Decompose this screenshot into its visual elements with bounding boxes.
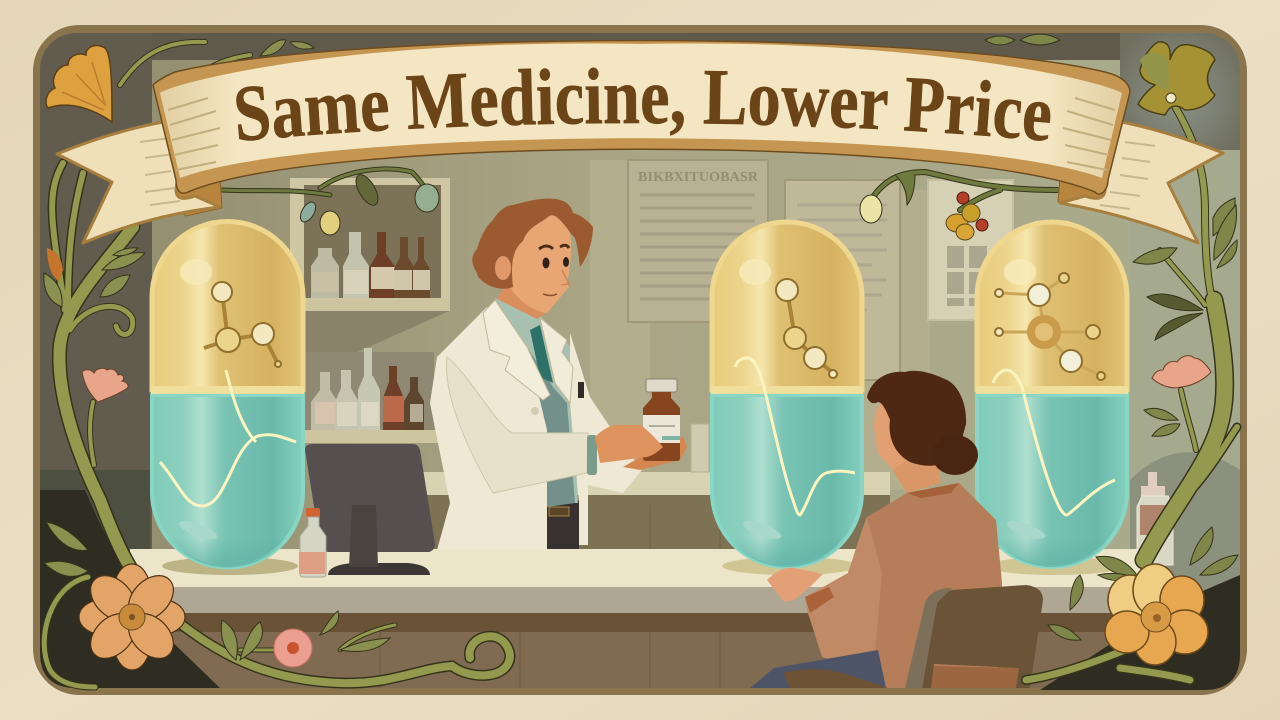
- hair: [867, 371, 966, 466]
- title: Same Medicine, Lower Price: [236, 68, 1050, 141]
- hair bun: [932, 435, 978, 475]
- lapels: [483, 300, 550, 400]
- banner right tail: [1058, 122, 1223, 243]
- tie: [530, 325, 553, 383]
- large peach flower bottom left: [79, 564, 185, 670]
- medicine bottle: [643, 379, 680, 461]
- back wall: [40, 33, 1240, 591]
- hanging sprig left: [297, 171, 439, 235]
- shelf shadow wedge: [306, 311, 448, 352]
- face details: [542, 258, 550, 268]
- chair: [783, 585, 1043, 688]
- wave: [993, 370, 1115, 515]
- pink flower right: [1152, 356, 1211, 388]
- hands: [767, 568, 823, 602]
- window chart: [928, 180, 1013, 320]
- plastic bottle right: [1137, 472, 1173, 565]
- wall poster: BIKBXITUOBASR: [638, 170, 759, 185]
- head: [874, 391, 920, 470]
- trousers: [547, 500, 579, 552]
- cuff: [587, 435, 597, 475]
- large gold flower bottom right: [1105, 564, 1208, 665]
- wall poster: [628, 160, 768, 322]
- floral border: right vines: [222, 103, 1237, 680]
- flower: top-right: [1138, 42, 1215, 115]
- banner main ribbon: [153, 40, 1130, 194]
- vine fill left: [44, 42, 510, 687]
- molecule: [776, 279, 837, 378]
- neck: [892, 460, 941, 493]
- vine fill right: [222, 103, 1237, 680]
- floral border: left vines: [44, 42, 510, 687]
- small bottle on counter: [299, 508, 326, 577]
- lower hand: [623, 437, 687, 470]
- vine outline right: [222, 103, 1237, 680]
- shirt and vest: [495, 298, 578, 503]
- hair: [472, 199, 593, 289]
- upper shelf unit: [290, 178, 450, 311]
- flower: top-left: [46, 46, 112, 122]
- orange bud left: [47, 248, 63, 282]
- banner left tail: [57, 122, 222, 243]
- lower shelf unit: [304, 348, 439, 443]
- back counter: [420, 424, 890, 555]
- leaves left: [44, 40, 390, 660]
- capsule 3: [976, 222, 1128, 575]
- dark corner bottom left: [40, 490, 220, 688]
- leaves right: [985, 34, 1238, 640]
- molecule: [204, 282, 281, 367]
- monitor: [305, 444, 435, 575]
- capsule 1: [151, 222, 304, 575]
- patient: [750, 371, 1002, 688]
- small pink flower bottom: [274, 629, 312, 667]
- bottles upper shelf: [311, 232, 430, 298]
- cuff: [805, 587, 834, 613]
- pink flower left: [82, 368, 128, 402]
- arm: [805, 517, 882, 664]
- molecule: [995, 273, 1105, 380]
- lab coat: [430, 307, 642, 550]
- wave: [160, 370, 296, 506]
- dark corner bottom right: [1040, 575, 1240, 690]
- upper hand: [595, 425, 663, 463]
- pharmacist: [430, 199, 687, 552]
- red berry sprig: [860, 175, 988, 240]
- neck and head: [497, 288, 546, 319]
- front counter: [130, 549, 1140, 693]
- second wall poster: [785, 180, 900, 380]
- vine outline left: [44, 42, 510, 687]
- sweater body: [848, 483, 1002, 688]
- title: [236, 68, 1050, 141]
- jeans: [750, 650, 886, 688]
- capsule 2: [711, 222, 863, 575]
- sleeve: [446, 357, 588, 493]
- wave: [735, 358, 855, 515]
